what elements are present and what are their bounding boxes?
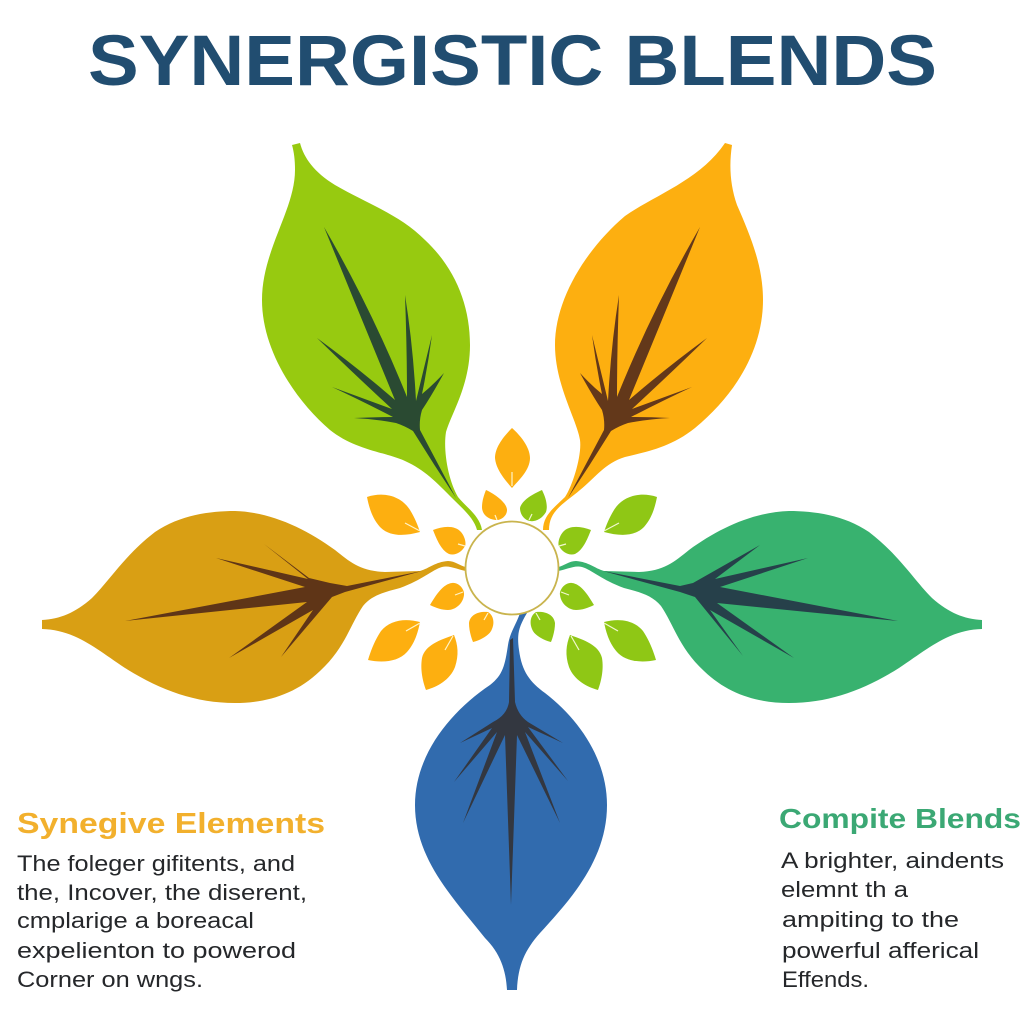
heading: Compite Blends: Compite Blends bbox=[779, 803, 1021, 834]
text block: Compite Blends: elemnt th a bbox=[781, 877, 909, 902]
leaf: blue, bottom bbox=[415, 613, 607, 990]
text block: Synegive Elements: Corner on wngs. bbox=[17, 967, 203, 992]
leaf: lime green, top left bbox=[262, 143, 482, 530]
small leaves: orange group bbox=[367, 428, 530, 690]
text block: Synegive Elements: the, Incover, the diserent, bbox=[17, 880, 307, 905]
title: SYNERGISTIC BLENDS bbox=[88, 22, 937, 101]
leaf: orange, top right bbox=[543, 143, 763, 530]
text block: Synegive Elements bbox=[17, 808, 325, 992]
central circle bbox=[466, 522, 558, 614]
text block: Synegive Elements: The foleger gifitents, and bbox=[17, 851, 295, 876]
small leaves: green group bbox=[520, 490, 657, 690]
leaf: amber, left bbox=[42, 511, 466, 703]
text block: Compite Blends: Effends. bbox=[782, 967, 869, 992]
text block: Compite Blends: A brighter, aindents bbox=[781, 848, 1004, 873]
heading: Synegive Elements: Synegive Elements bbox=[17, 808, 325, 840]
text block: Compite Blends: powerful afferical bbox=[782, 938, 979, 963]
text block: Compite Blends: ampiting to the bbox=[782, 907, 959, 932]
text block: Synegive Elements: expelienton to powerod bbox=[17, 938, 296, 963]
text block: Synegive Elements: cmplarige a boreacal bbox=[17, 908, 254, 933]
text block: Compite Blends bbox=[779, 803, 1021, 992]
leaf: green, right bbox=[558, 511, 982, 703]
